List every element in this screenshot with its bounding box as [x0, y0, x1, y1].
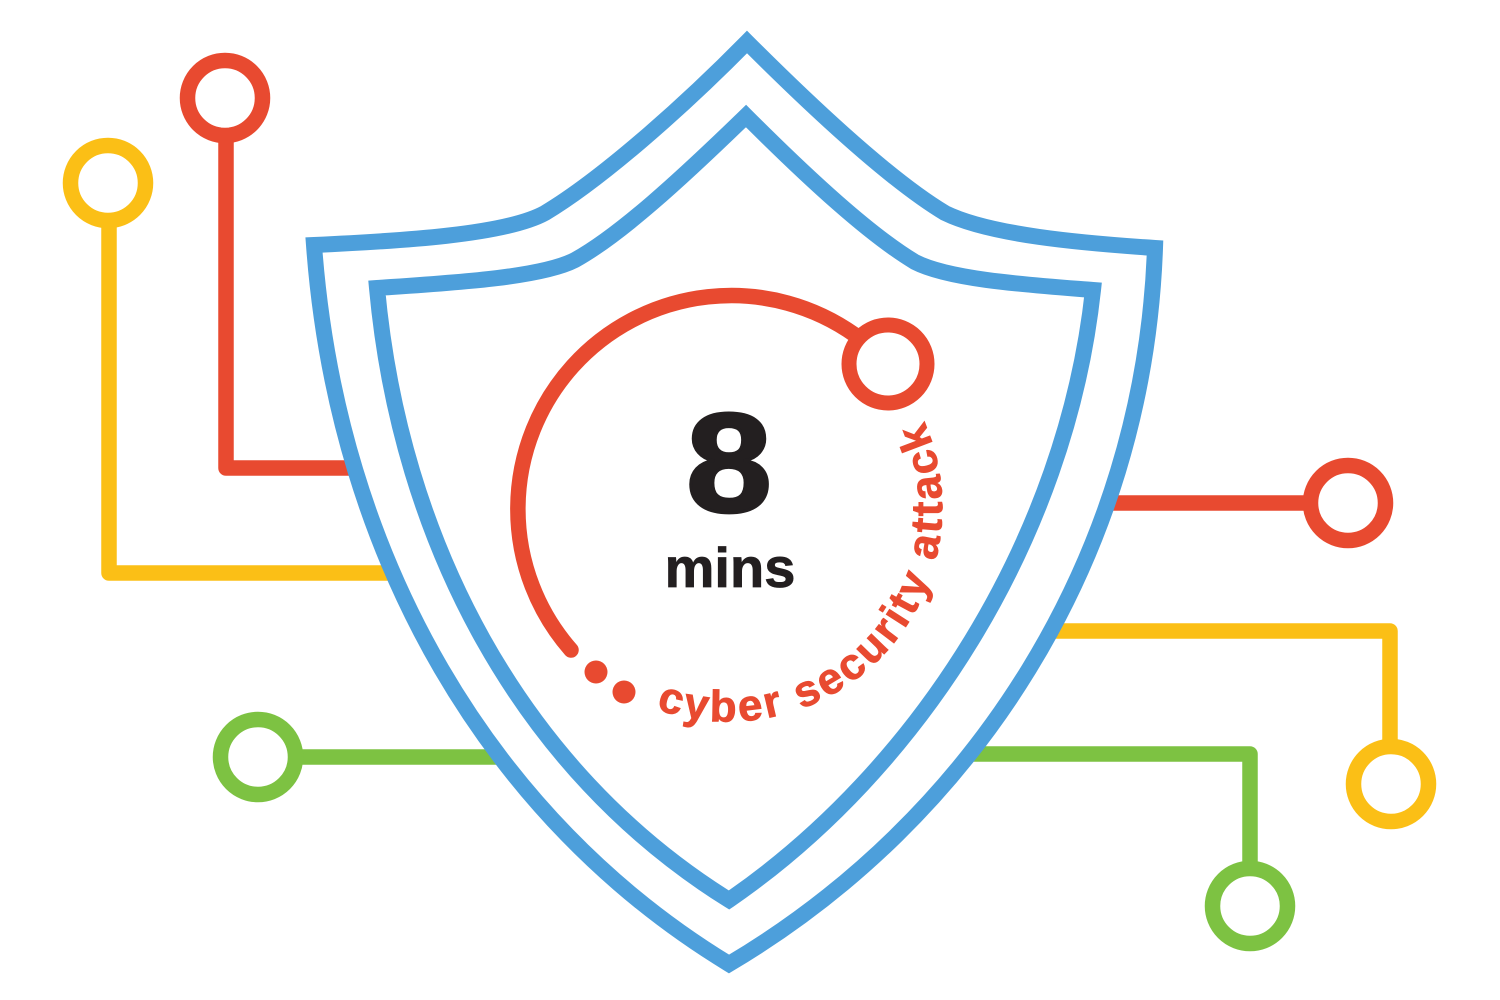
shield: outer outline — [314, 42, 1155, 964]
connector: yellow right — [1045, 631, 1428, 822]
connector: yellow left — [70, 146, 395, 573]
timer dot one — [584, 660, 608, 684]
unit: mins: mins — [665, 536, 795, 599]
connector: red top left — [188, 60, 360, 468]
timer ring — [849, 325, 927, 403]
shield: inner outline — [377, 116, 1093, 900]
number: 8: 8 — [686, 384, 772, 542]
timer: red arc with ring and dots — [518, 296, 927, 704]
connector: red right — [1100, 466, 1386, 540]
timer dot two — [612, 680, 636, 704]
connector: green right — [965, 754, 1288, 944]
connector: green left — [220, 720, 500, 794]
curved label: cyber security attack: cyber security attack — [660, 420, 943, 728]
